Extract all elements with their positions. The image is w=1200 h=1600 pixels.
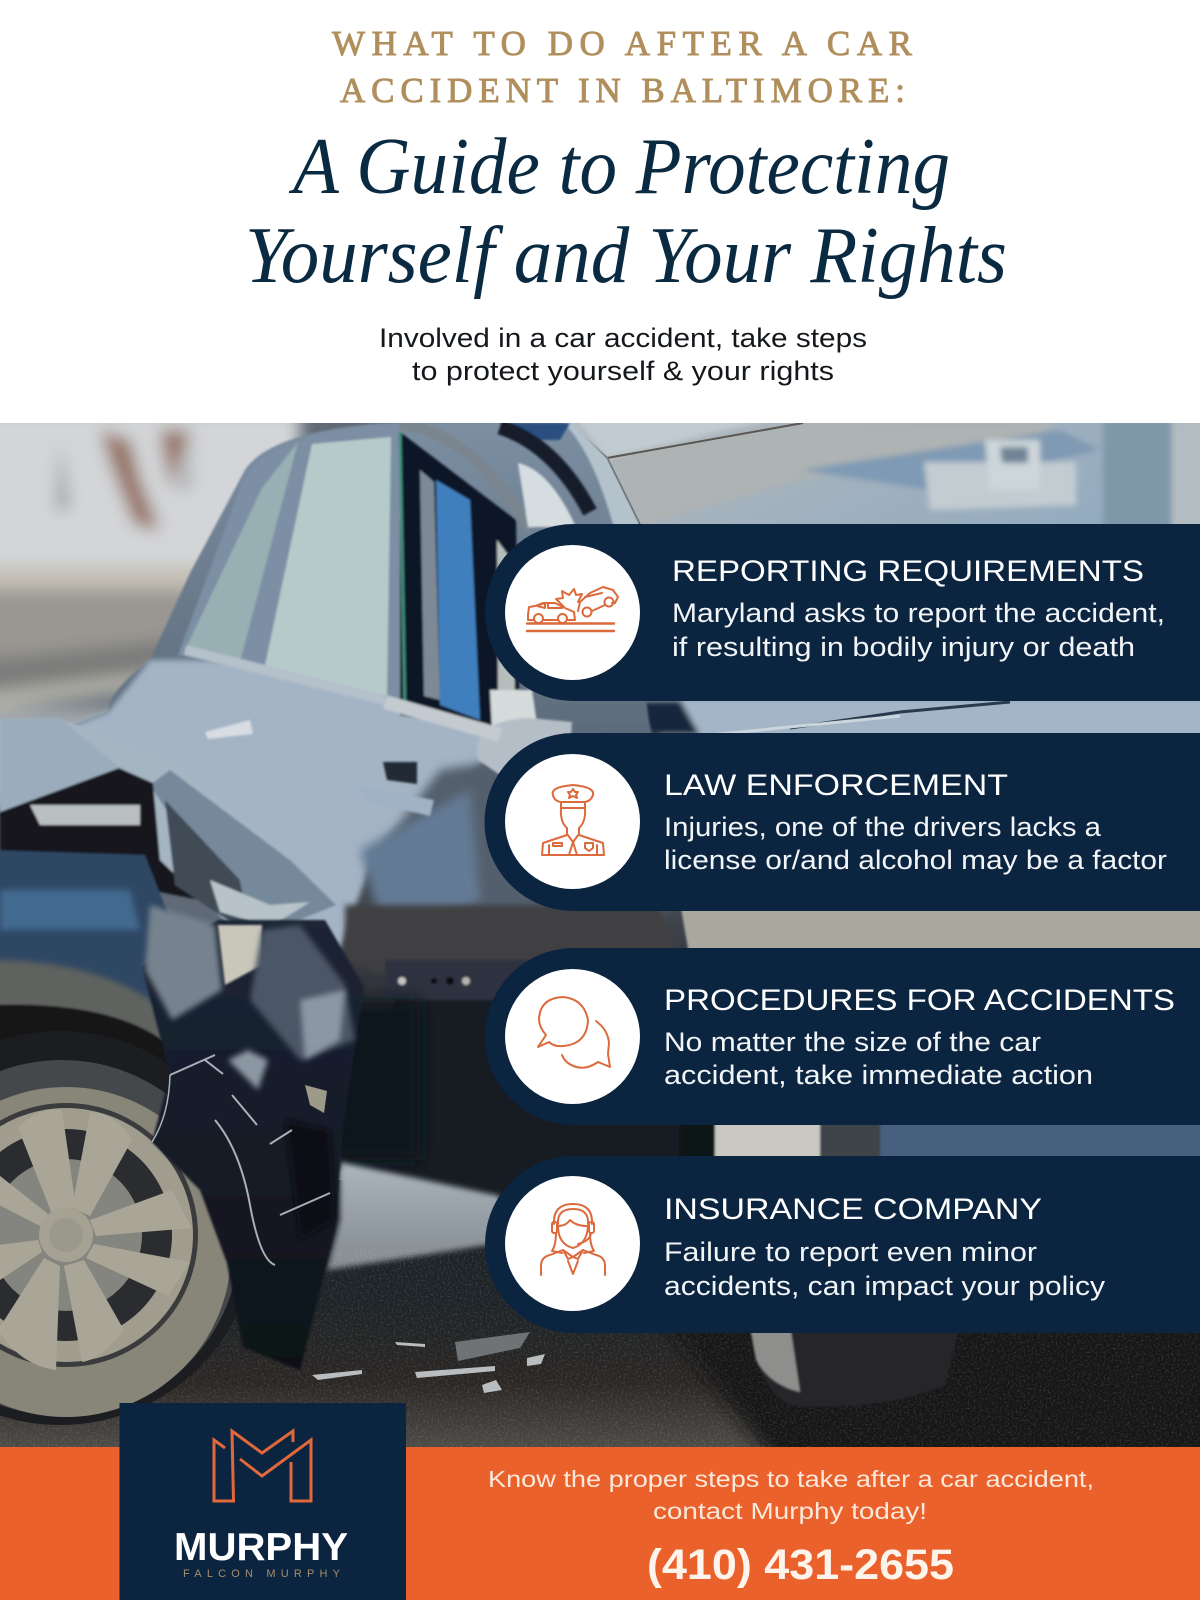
circle	[505, 969, 640, 1104]
description	[664, 1027, 1093, 1090]
heading: kicker: ACCIDENT IN BALTIMORE:	[340, 71, 905, 110]
subtitle: to protect yourself & your rights	[412, 356, 834, 386]
description: Maryland asks to report the accident,	[672, 598, 1165, 628]
heading: INSURANCE COMPANY	[664, 1193, 1042, 1226]
door shadow	[330, 1000, 420, 1160]
logo panel	[120, 1403, 406, 1600]
wiper	[790, 702, 1010, 728]
circle	[505, 1176, 640, 1311]
window frame	[178, 461, 402, 699]
banner: insurance company	[485, 1156, 1200, 1333]
title	[245, 123, 1007, 300]
description: if resulting in bodily injury or death	[672, 632, 1135, 662]
phone number: (410) 431-2655	[647, 1541, 954, 1589]
front car: hood	[0, 718, 336, 1100]
rear window	[186, 442, 298, 662]
logo name: MURPHY	[174, 1526, 348, 1569]
description	[664, 1237, 1106, 1301]
right car: pillar and seams	[582, 434, 641, 524]
circle	[505, 754, 640, 889]
banner: law enforcement	[485, 733, 1200, 911]
banner: procedures for accidents	[485, 948, 1200, 1125]
heading: kicker: WHAT TO DO AFTER A CAR	[332, 24, 913, 63]
heading: PROCEDURES FOR ACCIDENTS	[664, 984, 1175, 1017]
debris	[312, 1332, 545, 1393]
heading: kicker	[332, 24, 913, 110]
call to action	[488, 1466, 1094, 1524]
front wheel	[0, 1031, 257, 1425]
icon: M monogram	[214, 1431, 311, 1501]
title: A Guide to Protecting	[288, 123, 950, 211]
description: license or/and alcohol may be a factor	[664, 845, 1167, 875]
main window	[264, 437, 391, 696]
ground	[0, 1180, 770, 1447]
header background	[0, 0, 1200, 423]
rear car: side body	[60, 420, 690, 1180]
heading: LAW ENFORCEMENT	[664, 769, 1008, 802]
description: Failure to report even minor	[664, 1237, 1037, 1267]
logo tagline: FALCON MURPHY	[183, 1568, 341, 1580]
banner: reporting requirements	[485, 524, 1200, 701]
title: Yourself and Your Rights	[245, 212, 1007, 300]
right car: windshield and hood	[560, 410, 1200, 1180]
icon: call agent	[541, 1204, 605, 1275]
footer band	[0, 1447, 1200, 1600]
icon: speech bubbles	[538, 997, 610, 1068]
description: Injuries, one of the drivers lacks a	[664, 812, 1101, 842]
wall and road, blurred	[0, 423, 311, 724]
description	[664, 812, 1167, 875]
door handle	[356, 785, 434, 816]
torn bumper	[142, 905, 364, 1370]
photo: crashed cars	[0, 410, 1200, 1470]
heading: REPORTING REQUIREMENTS	[672, 555, 1144, 588]
subtitle: Involved in a car accident, take steps	[379, 323, 867, 353]
icon: police officer	[542, 785, 604, 855]
fender	[0, 848, 167, 1002]
description: accident, take immediate action	[664, 1060, 1093, 1090]
near-side tire under banner	[750, 1333, 958, 1406]
circle	[505, 545, 640, 680]
description: accidents, can impact your policy	[664, 1271, 1106, 1301]
subtitle	[379, 323, 867, 386]
icon: car crash	[527, 587, 618, 631]
far wheel	[679, 1125, 881, 1156]
description	[672, 598, 1165, 662]
call to action: Know the proper steps to take after a car accident,	[488, 1466, 1094, 1492]
description: No matter the size of the car	[664, 1027, 1041, 1057]
call to action: contact Murphy today!	[653, 1498, 927, 1524]
